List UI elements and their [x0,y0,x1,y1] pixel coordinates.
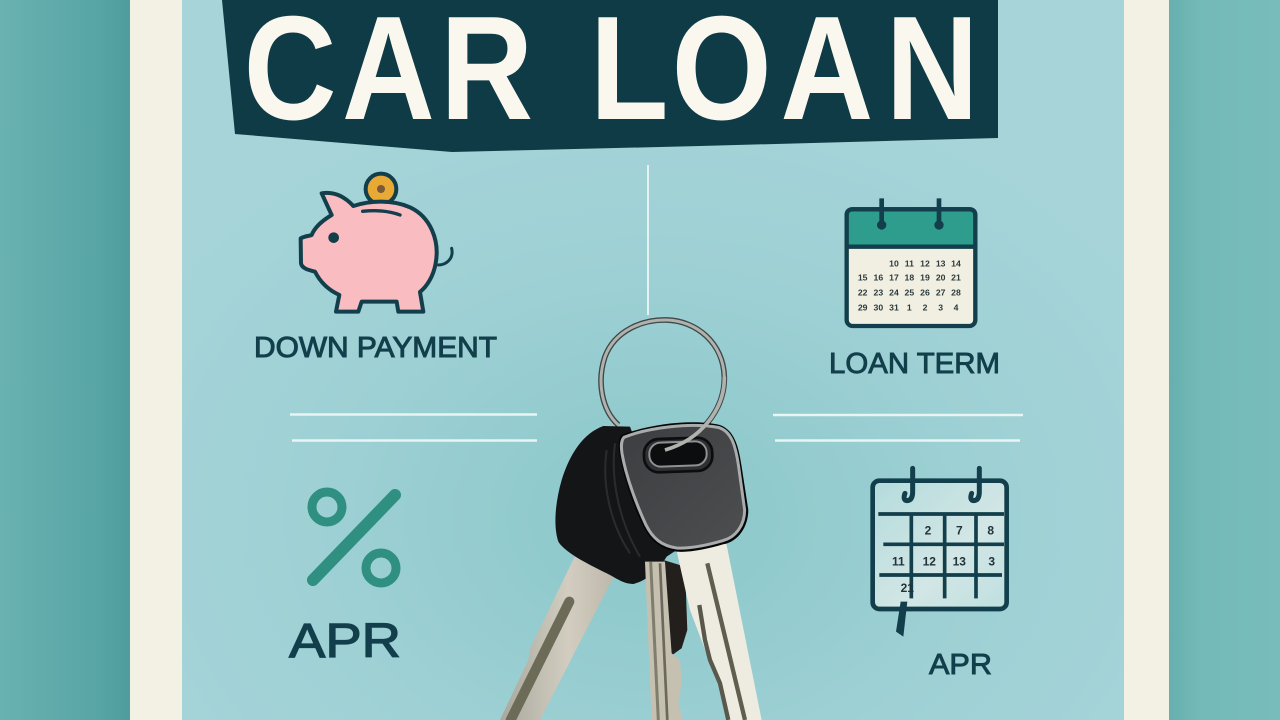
label: apr right: APR [929,649,992,681]
icon: teal calendar: 13 [936,258,946,268]
key ring back [601,320,724,450]
icon: grid calendar: 7 [956,524,963,538]
center divider [647,165,649,315]
icon: teal calendar: 2 [923,303,928,313]
icon: teal calendar: 28 [951,288,961,298]
icon: teal calendar: 31 [889,303,899,313]
icon: teal calendar: 25 [905,288,914,298]
background wall left [0,0,131,720]
icon: grid calendar: 3 [988,554,995,568]
icon: teal calendar: 17 [889,273,899,283]
icon: grid calendar: 8 [987,524,994,538]
icon: teal calendar: 27 [936,288,946,298]
icon: teal calendar: 1 [907,303,912,313]
icon: grid calendar: 2 [925,524,932,538]
icon: teal calendar: 12 [920,258,930,268]
label: apr left: APR [289,615,401,668]
left key blade [500,556,614,720]
label: down payment: DOWN PAYMENT [254,332,497,364]
icon: teal calendar: 4 [954,303,959,313]
front key fob [619,422,748,552]
label: loan term: LOAN TERM [829,348,1000,380]
icon: teal calendar: 24 [889,288,899,298]
icon: percent [312,492,396,583]
left double rule [290,414,537,440]
icon: teal calendar: 14 [951,258,961,268]
icon: teal calendar: 10 [889,258,899,268]
back key fob [555,426,677,584]
icon: grid calendar [873,468,1007,637]
icon: grid calendar: 11 [892,554,905,568]
poster panel [182,0,1124,720]
middle key blade [645,560,687,720]
icon: teal calendar: 21 [951,273,961,283]
icon: teal calendar: 19 [920,273,930,283]
icon: teal calendar: 30 [874,303,883,313]
icon: teal calendar: 22 [858,288,868,298]
icon: teal calendar: 3 [938,303,943,313]
icon: teal calendar: 26 [920,288,930,298]
title banner [222,0,998,152]
icon: teal calendar: 29 [858,303,868,313]
icon: teal calendar: 20 [936,273,946,283]
right double rule [773,415,1023,440]
icon: grid calendar: 21 [901,581,914,595]
front key blade [676,542,762,720]
icon: grid calendar: 13 [953,554,966,568]
icon: piggy bank [301,174,452,312]
car keys [500,320,762,720]
icon: teal calendar: 16 [874,273,883,283]
icon: teal calendar: 23 [874,288,883,298]
icon: teal calendar: 11 [905,258,914,268]
background wall right [1168,0,1280,720]
key ring front [665,377,724,450]
icon: teal calendar [847,198,975,326]
icon: teal calendar: 18 [905,273,914,283]
icon: grid calendar: 12 [923,554,936,568]
icon: teal calendar: 15 [858,273,868,283]
